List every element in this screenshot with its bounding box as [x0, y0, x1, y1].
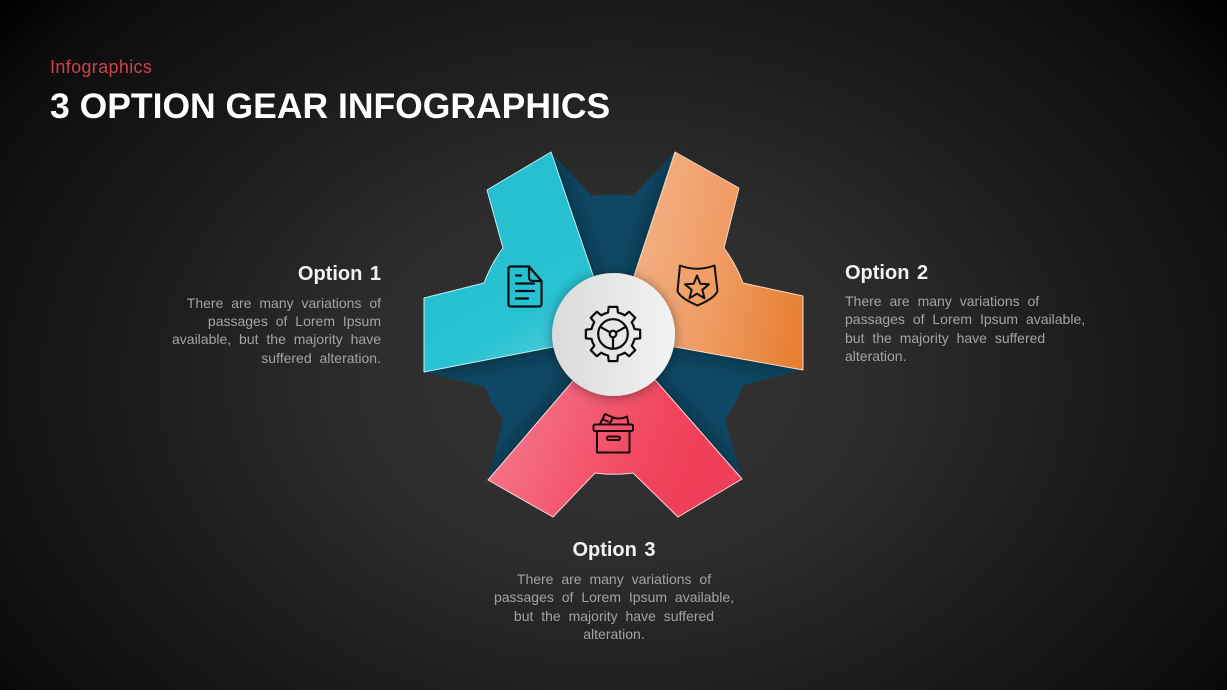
option 1 body: passages of Lorem Ipsum	[208, 313, 381, 329]
text: option 2	[845, 262, 1085, 364]
option 3 heading: Option 3	[572, 539, 656, 561]
icon: gear with steering wheel	[586, 307, 640, 361]
option 3 body: passages of Lorem Ipsum available,	[494, 589, 734, 605]
option 2 body	[845, 293, 1085, 364]
text: option 1	[172, 263, 382, 366]
option 1 heading: Option 1	[298, 263, 381, 285]
icon: document	[508, 266, 542, 306]
option 1 body	[172, 294, 382, 366]
segment: option 1 teal	[424, 152, 613, 372]
icon: shield with star	[678, 266, 718, 306]
segment: option 2 orange	[613, 152, 803, 370]
option 1 body: There are many variations of	[187, 294, 381, 310]
option 2 body: There are many variations of	[845, 293, 1039, 309]
option 1 body: available, but the majority have	[172, 331, 381, 347]
option 1 body: suffered alteration.	[261, 350, 381, 366]
center hub	[552, 273, 675, 396]
option 2 body: passages of Lorem Ipsum available,	[845, 311, 1085, 327]
option 2 heading: Option 2	[845, 262, 928, 284]
eyebrow label: Infographics	[50, 57, 152, 77]
option 2 body: alteration.	[845, 348, 906, 364]
option 3 body	[494, 571, 734, 642]
option 2 body: but the majority have suffered	[845, 330, 1045, 346]
dark gear base	[425, 152, 802, 479]
option 3 body: but the majority have suffered	[514, 608, 714, 624]
gear diagram	[424, 152, 804, 518]
icon: box	[594, 414, 633, 452]
text: option 3	[494, 539, 734, 642]
option 3 body: alteration.	[583, 626, 645, 642]
title: 3 OPTION GEAR INFOGRAPHICS	[50, 86, 610, 126]
segment: option 3 red	[488, 340, 742, 517]
option 3 body: There are many variations of	[517, 571, 711, 587]
